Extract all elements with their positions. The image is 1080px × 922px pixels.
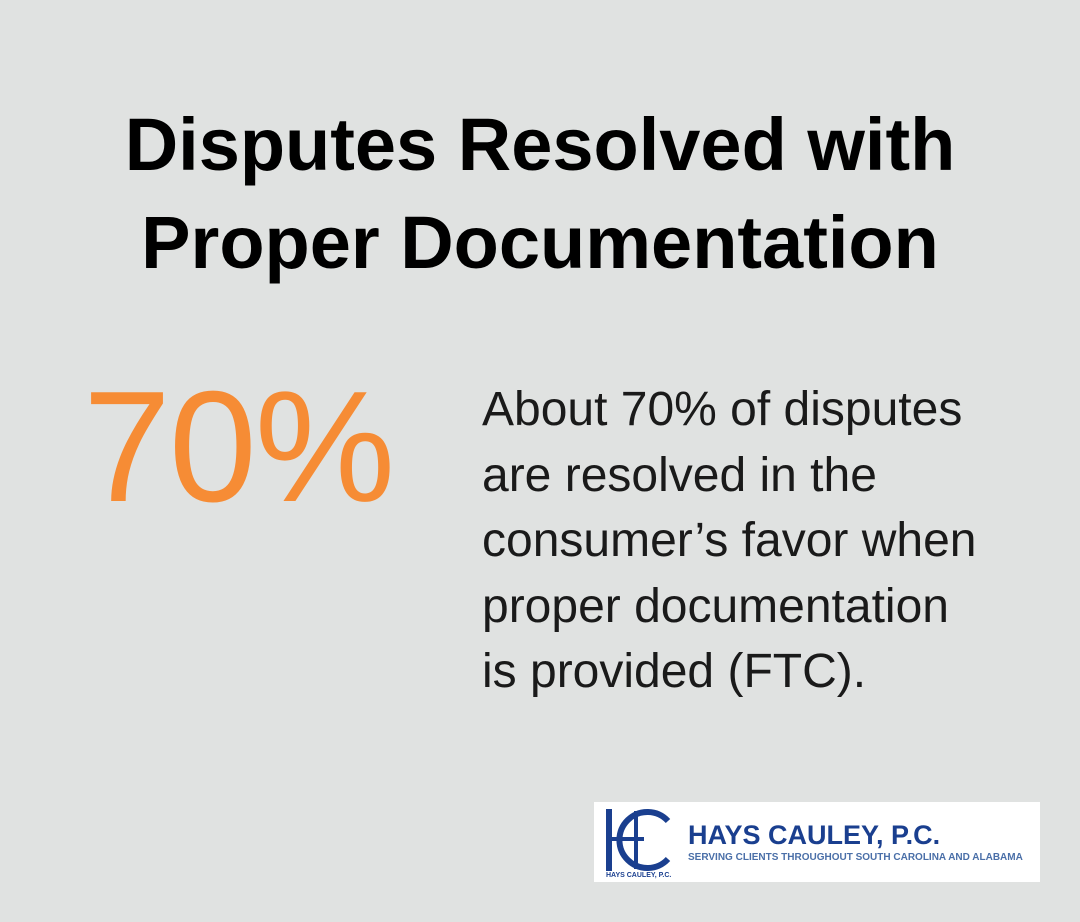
description text: About 70% of disputes	[482, 383, 962, 436]
logo monogram HC	[606, 809, 670, 871]
title	[125, 103, 955, 284]
title: Proper Documentation	[141, 201, 939, 284]
logo: Hays Cauley	[594, 802, 1040, 882]
title: Disputes Resolved with	[125, 103, 955, 186]
description text: proper documentation	[482, 580, 949, 632]
logo tagline: SERVING CLIENTS THROUGHOUT SOUTH CAROLINA AND ALABAMA	[688, 852, 1023, 863]
logo name: HAYS CAULEY, P.C.	[688, 820, 940, 850]
description text	[482, 383, 976, 698]
big stat: 70%: 70%	[83, 359, 393, 535]
description text: is provided (FTC).	[482, 645, 866, 698]
logo small caption: HAYS CAULEY, P.C.	[606, 872, 671, 879]
description text: consumer’s favor when	[482, 514, 976, 567]
description text: are resolved in the	[482, 448, 877, 502]
